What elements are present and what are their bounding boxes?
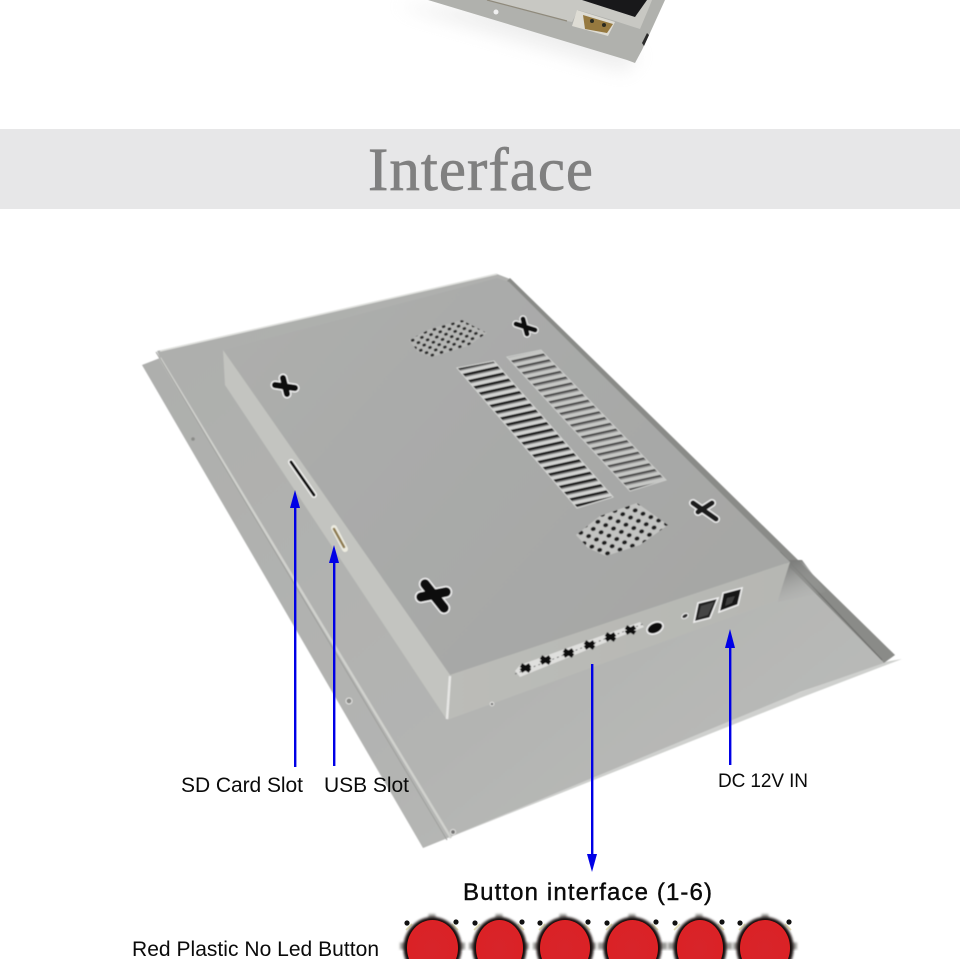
USB slot — [334, 528, 345, 549]
button 3 — [533, 914, 596, 959]
screw: flange lower — [346, 698, 352, 704]
round power hole — [645, 619, 665, 637]
dark rail on right edge — [507, 278, 895, 663]
label: SD Card Slot: SD Card Slot — [181, 774, 303, 797]
product photo: back of monitor panel — [142, 274, 902, 848]
rail inner line — [780, 552, 882, 660]
screw: flange upper — [191, 437, 195, 441]
small indicator — [681, 612, 689, 620]
button 6 — [733, 914, 797, 959]
button 4 — [598, 914, 667, 959]
box shadow at right corner — [778, 560, 826, 602]
power switch right — [719, 588, 742, 612]
arrow: SD card slot — [290, 490, 300, 767]
product photo: monitor corner at top — [395, 0, 665, 72]
screw: rail bottom — [450, 830, 456, 834]
keyhole: large — [421, 584, 446, 608]
keyhole: top left — [275, 378, 295, 394]
box left side face — [223, 350, 450, 720]
title: Interface — [368, 137, 593, 204]
button 2 — [469, 914, 529, 959]
button connector strip — [515, 622, 644, 677]
keyhole: right — [693, 503, 716, 519]
box front face — [447, 562, 790, 720]
keyhole: top right — [516, 319, 535, 334]
button 1 — [400, 914, 465, 959]
vent holes bottom — [576, 503, 668, 556]
screw: front panel — [490, 702, 494, 706]
SD card slot — [291, 462, 314, 495]
red buttons row — [400, 914, 797, 959]
button 5 — [668, 914, 732, 959]
arrow: USB slot — [329, 545, 339, 766]
light lower lip of panel — [423, 659, 902, 848]
heading band: Interface — [0, 129, 960, 209]
flange fold lines — [156, 274, 497, 840]
box corner highlight — [447, 676, 450, 719]
label: DC 12V IN: DC 12V IN — [718, 771, 808, 792]
vent holes top — [409, 320, 487, 357]
box top face — [223, 278, 790, 675]
arrow: button interface — [587, 664, 597, 872]
vent slats right — [507, 350, 666, 491]
power switch left — [694, 598, 718, 622]
vent slats left — [457, 361, 613, 508]
mounting flange and panel — [142, 274, 884, 848]
label: USB Slot: USB Slot — [324, 774, 409, 797]
label: Button interface (1-6): Button interface (1-6) — [463, 879, 712, 906]
arrow: DC 12V — [725, 629, 735, 765]
